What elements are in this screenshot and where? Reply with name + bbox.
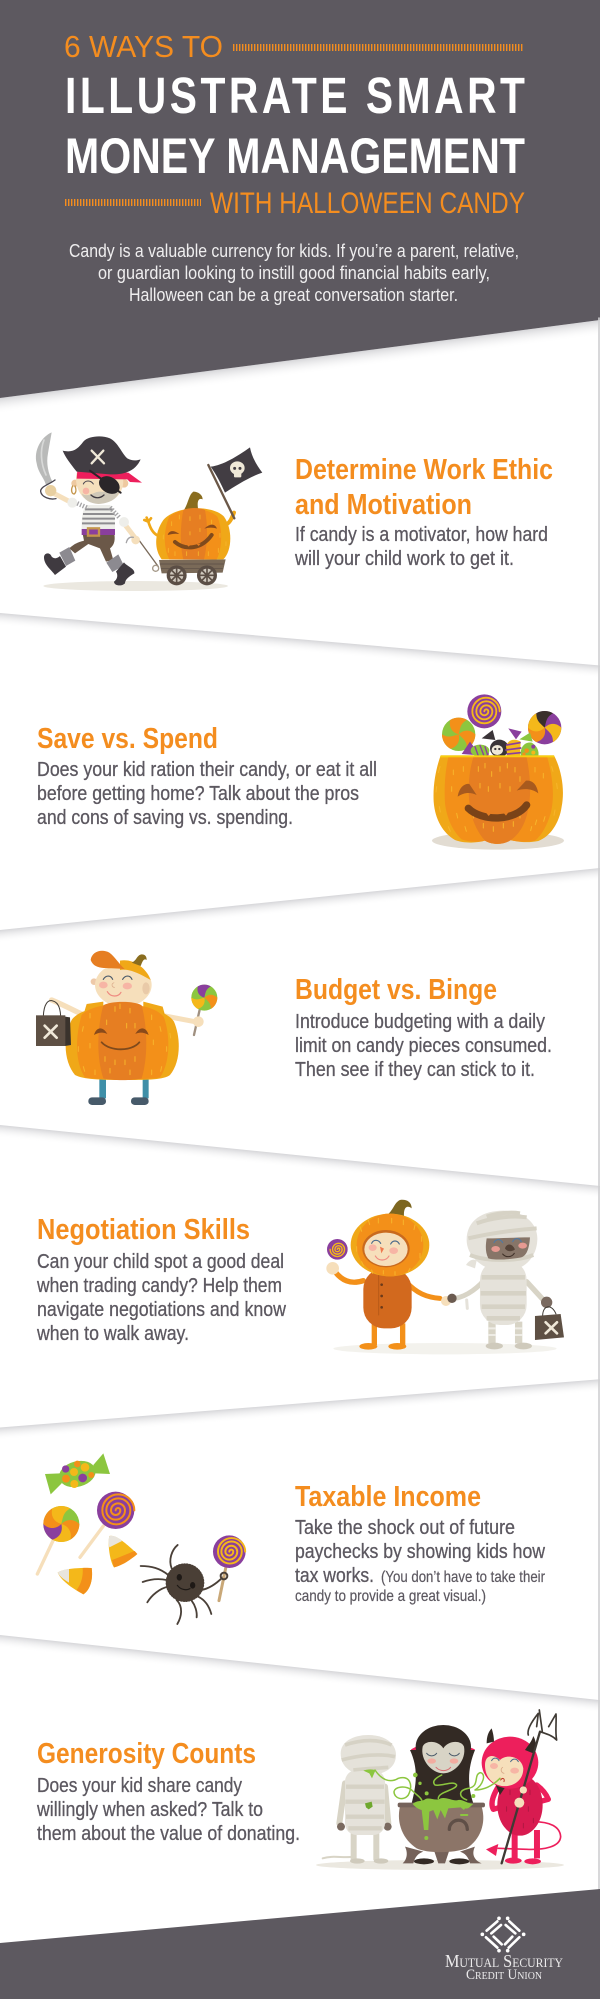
intro paragraph: Halloween can be a great conversation starter. xyxy=(129,285,458,305)
vampire xyxy=(410,1725,475,1803)
illustration: mummy, vampire and devil at cauldron xyxy=(316,1710,564,1870)
logo wordmark xyxy=(445,1951,564,1983)
body text xyxy=(295,1517,546,1605)
body text: limit on candy pieces consumed. xyxy=(295,1035,552,1057)
panel: header banner xyxy=(0,0,600,416)
body text: Introduce budgeting with a daily xyxy=(295,1011,545,1033)
heading: Negotiation Skills xyxy=(37,1214,250,1246)
body text: navigate negotiations and know xyxy=(37,1299,286,1321)
body text: when to walk away. xyxy=(36,1323,189,1345)
mummy xyxy=(323,1735,396,1864)
body text: paychecks by showing kids how xyxy=(295,1541,545,1563)
illustration: pumpkin full of candy xyxy=(432,694,564,850)
panel: budget vs binge xyxy=(36,951,552,1105)
panel: determine work ethic xyxy=(36,432,553,591)
subtitle: WITH HALLOWEEN CANDY xyxy=(210,187,525,220)
body text xyxy=(37,759,377,829)
heading: Taxable Income xyxy=(295,1481,481,1513)
lollipop: purple yellow black swirl xyxy=(524,706,561,744)
title line 1: ILLUSTRATE SMART xyxy=(65,67,525,124)
body text xyxy=(36,1251,286,1345)
panel: save vs spend xyxy=(37,694,564,850)
candy corn xyxy=(58,1536,137,1594)
body text: tax works. xyxy=(295,1565,374,1587)
body text: candy to provide a great visual.) xyxy=(295,1588,486,1605)
panel: taxable income xyxy=(37,1453,546,1624)
dashed rule bottom xyxy=(65,199,201,206)
illustration: kid in pumpkin costume xyxy=(36,951,217,1105)
body text: will your child work to get it. xyxy=(294,548,514,570)
green potion swirls xyxy=(375,1770,500,1800)
cauldron xyxy=(398,1798,485,1864)
logo wordmark: Credit Union xyxy=(466,1967,542,1983)
body text: Take the shock out of future xyxy=(295,1517,515,1539)
body text: If candy is a motivator, how hard xyxy=(295,524,548,546)
heading: Generosity Counts xyxy=(37,1738,256,1770)
illustration: pirate pulling pumpkin wagon xyxy=(36,432,262,591)
body text: them about the value of donating. xyxy=(37,1823,300,1845)
illustration: pumpkin kid and mummy shaking hands xyxy=(326,1200,564,1354)
body text xyxy=(295,1011,552,1081)
dashed rule top xyxy=(233,44,523,51)
body text xyxy=(36,1775,300,1845)
body text: Can your child spot a good deal xyxy=(37,1251,284,1273)
heading: Determine Work Ethic xyxy=(295,454,553,486)
intro paragraph: or guardian looking to instill good financial habits early, xyxy=(98,263,490,283)
body text: when trading candy? Help them xyxy=(36,1275,282,1297)
panel: footer xyxy=(0,1889,600,1999)
icon: logo diamond xyxy=(481,1917,525,1952)
heading: and Motivation xyxy=(295,489,472,521)
panel: generosity counts xyxy=(36,1710,564,1870)
panel: negotiation skills xyxy=(36,1200,564,1354)
devil xyxy=(482,1710,561,1864)
intro paragraph: Candy is a valuable currency for kids. If you’re a parent, relative, xyxy=(69,241,519,261)
heading: Budget vs. Binge xyxy=(295,974,497,1006)
lollipop: spiral xyxy=(467,694,501,728)
lollipop: green orange swirl xyxy=(438,713,475,751)
body text: Does your kid share candy xyxy=(37,1775,242,1797)
body text: Then see if they can stick to it. xyxy=(295,1059,535,1081)
body text: before getting home? Talk about the pros xyxy=(37,783,359,805)
illustration: candy and spider xyxy=(37,1453,246,1624)
intro paragraph xyxy=(69,241,519,305)
body text: willingly when asked? Talk to xyxy=(36,1799,263,1821)
heading: Save vs. Spend xyxy=(37,723,218,755)
wrapped candy xyxy=(45,1453,110,1494)
logo wordmark: Mutual Security xyxy=(445,1951,564,1971)
heading xyxy=(295,454,553,521)
spider xyxy=(141,1545,223,1624)
body text: and cons of saving vs. spending. xyxy=(37,807,293,829)
body text: (You don’t have to take their xyxy=(381,1569,546,1586)
body text xyxy=(294,524,548,570)
body text: Does your kid ration their candy, or eat it all xyxy=(37,759,377,781)
heading: 6 ways to: 6 WAYS TO xyxy=(64,29,223,64)
